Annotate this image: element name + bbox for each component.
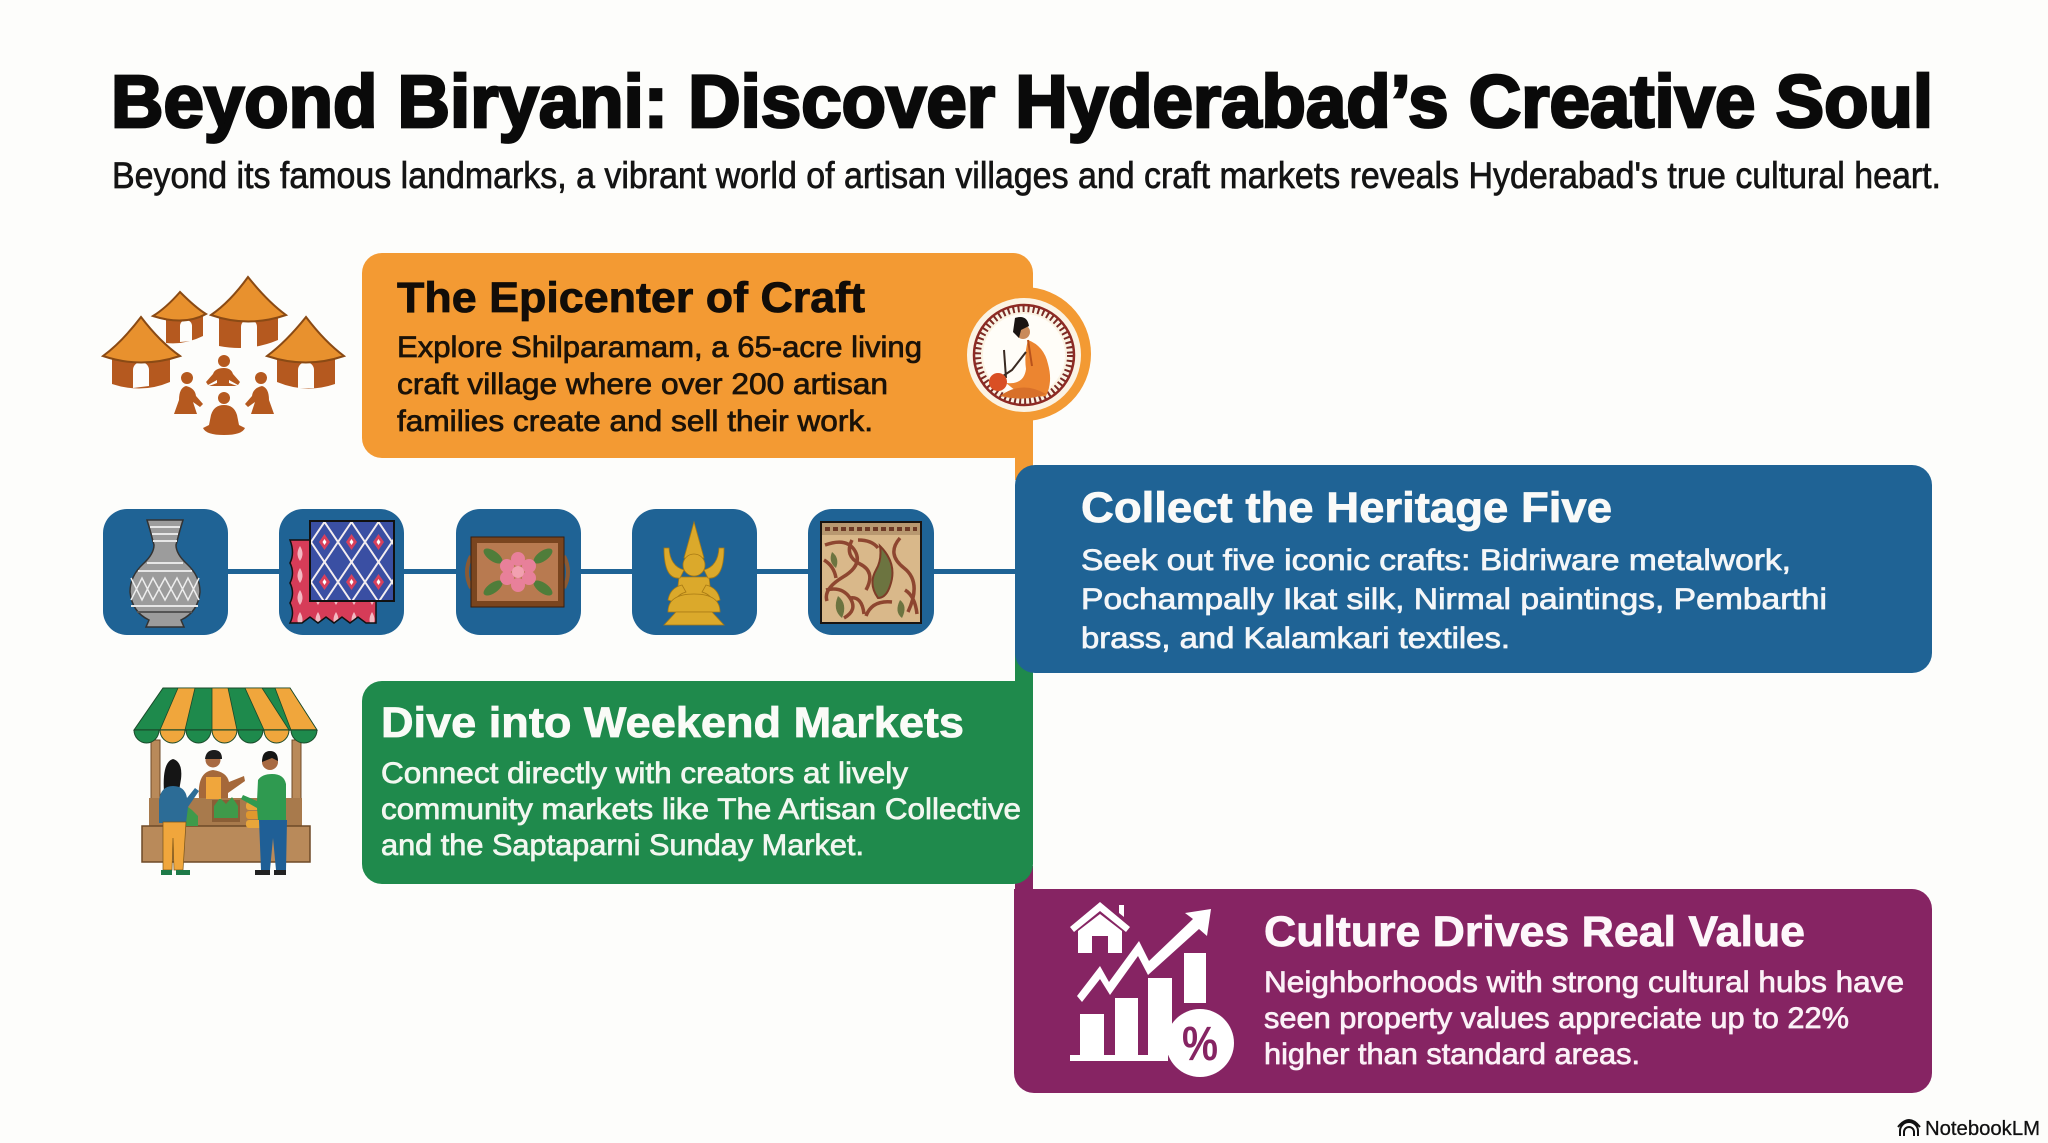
icon: market stall (134, 688, 317, 875)
body: value: seen property values appreciate up to 22% (1264, 1002, 1849, 1035)
body: epicenter: craft village where over 200 artisan (397, 368, 888, 401)
panel: Dive into Weekend Markets (362, 681, 1033, 884)
heading: value: Culture Drives Real Value (1264, 908, 1805, 956)
purple connector behind green panel (1015, 866, 1033, 896)
panel: Collect the Heritage Five (1015, 465, 1932, 673)
heading: epicenter: The Epicenter of Craft (397, 274, 865, 322)
logo: NotebookLM: NotebookLM (1925, 1118, 2040, 1140)
panel: The Epicenter of Craft (362, 253, 1033, 480)
body: heritage (1081, 544, 1827, 655)
icon: craft village huts and artisans (103, 277, 344, 435)
body: epicenter (397, 331, 922, 438)
green connector behind blue panel (1015, 650, 1033, 700)
body: heritage: Pochampally Ikat silk, Nirmal paintings, Pembarthi (1081, 583, 1827, 616)
heading: heritage: Collect the Heritage Five (1081, 484, 1612, 532)
body: value: higher than standard areas. (1264, 1038, 1640, 1071)
icon: property value chart (1070, 902, 1234, 1077)
body: markets: and the Saptaparni Sunday Market. (381, 829, 864, 862)
body: heritage: brass, and Kalamkari textiles. (1081, 622, 1510, 655)
connector: craft tiles to heritage panel (228, 569, 1018, 574)
panel: Culture Drives Real Value (1014, 889, 1932, 1093)
icon: property value chart: % (1182, 1018, 1218, 1071)
body: markets: community markets like The Artisan Collective (381, 793, 1021, 826)
icon: artisan badge (957, 287, 1091, 421)
body: markets (381, 757, 1021, 862)
body: value (1264, 966, 1904, 1071)
heading: markets: Dive into Weekend Markets (381, 699, 964, 747)
body: value: Neighborhoods with strong cultural hubs have (1264, 966, 1904, 999)
body: markets: Connect directly with creators at lively (381, 757, 908, 790)
tile: Pembarthi brass statue (632, 509, 757, 635)
figure: seller (199, 750, 245, 799)
body: epicenter: Explore Shilparamam, a 65-acre living (397, 331, 922, 364)
tile: Kalamkari textile (808, 509, 934, 635)
tile: Bidriware vase (103, 509, 228, 635)
subtitle: Beyond its famous landmarks, a vibrant world of artisan villages and craft markets reveals Hyderabad's true cultural heart. (112, 155, 1941, 196)
body: heritage: Seek out five iconic crafts: Bidriware metalwork, (1081, 544, 1791, 577)
tile: Nirmal painted tray (456, 509, 581, 635)
tile: Pochampally Ikat silk (279, 509, 404, 635)
title: Beyond Biryani: Discover Hyderabad’s Creative Soul (111, 60, 1933, 143)
figure: man customer (241, 751, 287, 875)
figure: woman customer (159, 759, 199, 875)
body: epicenter: families create and sell their work. (397, 405, 873, 438)
